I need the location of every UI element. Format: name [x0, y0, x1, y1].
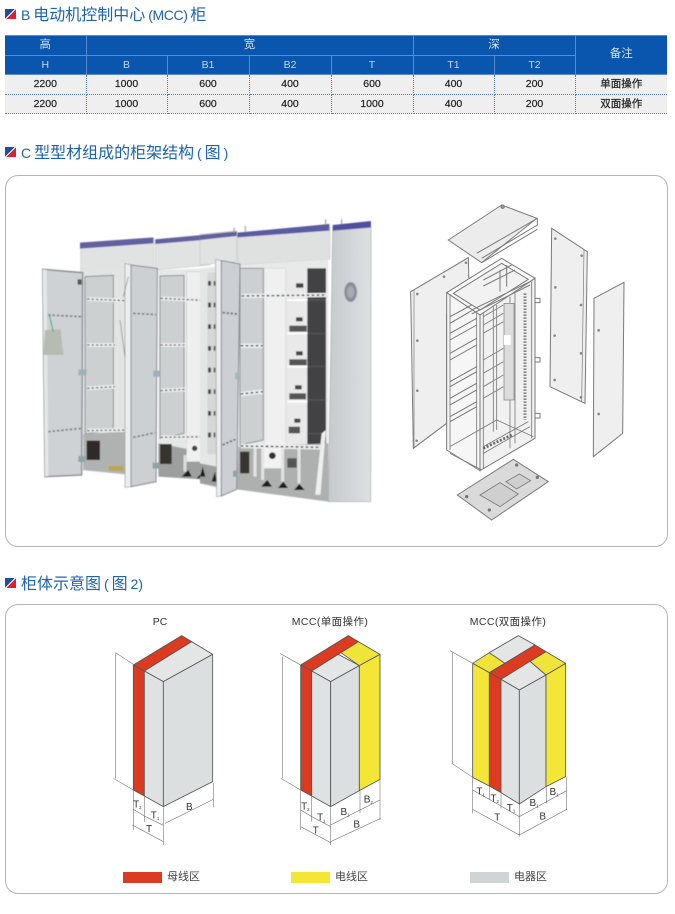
dimensions table: 1000 — [115, 98, 138, 110]
dimensions table: 2200 — [34, 78, 57, 90]
dimensions table: 600 — [199, 78, 217, 90]
panel: cabinet diagrams — [5, 604, 668, 894]
dimensions table: T2 — [528, 58, 541, 70]
diagram: MCC single-sided cabinet: T — [317, 813, 323, 824]
dimensions table: 深 — [488, 38, 500, 50]
dimensions table: 2200 — [34, 98, 57, 110]
diagram: MCC single-sided cabinet: T — [313, 825, 319, 836]
diagram: MCC single-sided cabinet: 2 — [370, 800, 373, 805]
panel: frame structure — [5, 175, 668, 547]
dimensions table: 600 — [199, 98, 217, 110]
diagram: MCC single-sided cabinet: 1 — [347, 813, 350, 818]
diagram: PC cabinet: 2 — [139, 805, 142, 810]
dimensions table: 600 — [363, 78, 381, 90]
dimensions table: B — [123, 58, 130, 70]
diagram: MCC double-sided cabinet — [450, 636, 567, 837]
heading: 柜体示意图: 柜体示意图 ( 图 2) — [21, 576, 143, 593]
dimensions table: 200 — [526, 78, 543, 90]
dimensions table: 单面操作 — [600, 78, 642, 90]
diagram: MCC double-sided cabinet: 2 — [556, 793, 559, 798]
legend: 电线区 — [291, 870, 368, 883]
diagram: PC cabinet: T — [133, 799, 139, 810]
drawing: exploded cabinet frame — [411, 205, 624, 520]
legend: 电器区 — [470, 870, 547, 883]
diagram: MCC double-sided cabinet: T — [494, 813, 500, 824]
diagram: MCC double-sided cabinet: 1 — [536, 804, 539, 809]
dimensions table: 400 — [281, 98, 299, 110]
diagram: MCC double-sided cabinet: 1 — [513, 809, 516, 814]
diagram: MCC single-sided cabinet: 2 — [307, 807, 310, 812]
dimensions table: T — [369, 58, 375, 70]
dimensions table: 400 — [445, 98, 462, 110]
diagram: PC cabinet: B — [186, 802, 193, 813]
diagram: MCC double-sided cabinet: B — [529, 798, 536, 809]
legend: 电器区: 电器区 — [514, 871, 547, 883]
diagram: MCC double-sided cabinet: T — [507, 803, 513, 814]
dimensions table: 宽 — [244, 38, 255, 50]
diagram: MCC single-sided cabinet — [280, 636, 381, 845]
dimensions table: 400 — [445, 78, 462, 90]
diagram title: MCC 双面操作: MCC(双面操作) — [470, 615, 546, 628]
diagram: MCC double-sided cabinet: T — [490, 793, 497, 804]
diagram: MCC single-sided cabinet: B — [364, 794, 370, 805]
dimensions table: B2 — [284, 58, 296, 70]
diagram: PC cabinet: 1 — [157, 816, 160, 821]
dimensions table: 400 — [281, 78, 299, 90]
dimensions table: B1 — [202, 58, 214, 70]
dimensions table — [5, 35, 667, 114]
diagram: MCC double-sided cabinet: B — [549, 787, 556, 798]
dimensions table: T1 — [447, 58, 460, 70]
diagram: MCC double-sided cabinet: 1 — [483, 792, 486, 797]
diagram title: PC: PC — [153, 616, 168, 628]
diagram: PC cabinet: T — [146, 824, 152, 835]
diagram: MCC double-sided cabinet: 2 — [497, 799, 500, 804]
dimensions table: 200 — [526, 98, 543, 110]
diagram: PC cabinet: T — [151, 810, 157, 821]
diagram: PC cabinet — [113, 636, 213, 845]
dimensions table: H — [41, 58, 49, 70]
heading: B 电动机控制中心 (MCC) 柜: B 电动机控制中心 (MCC) 柜 — [21, 7, 206, 24]
dimensions table: 高 — [40, 38, 51, 50]
dimensions table: 备注 — [610, 48, 633, 60]
diagram: MCC single-sided cabinet: B — [340, 807, 347, 818]
photo: opened cabinets — [43, 219, 371, 502]
dimensions table: 双面操作 — [600, 98, 642, 110]
dimensions table: 1000 — [115, 78, 138, 90]
diagram: MCC single-sided cabinet: 1 — [323, 818, 326, 823]
legend: 母线区 — [123, 870, 200, 883]
heading: C 型型材组成的柜架结构: C 型型材组成的柜架结构 ( 图 ) — [21, 145, 228, 162]
legend: 母线区: 母线区 — [167, 871, 200, 883]
diagram: MCC single-sided cabinet: T — [301, 801, 307, 812]
diagram: MCC double-sided cabinet: B — [539, 811, 546, 822]
diagram: MCC double-sided cabinet: T — [476, 787, 483, 798]
legend: 电线区: 电线区 — [335, 871, 368, 883]
diagram title: MCC 单面操作: MCC(单面操作) — [292, 615, 368, 628]
dimensions table: 1000 — [360, 98, 384, 110]
diagram: MCC single-sided cabinet: B — [353, 820, 360, 831]
